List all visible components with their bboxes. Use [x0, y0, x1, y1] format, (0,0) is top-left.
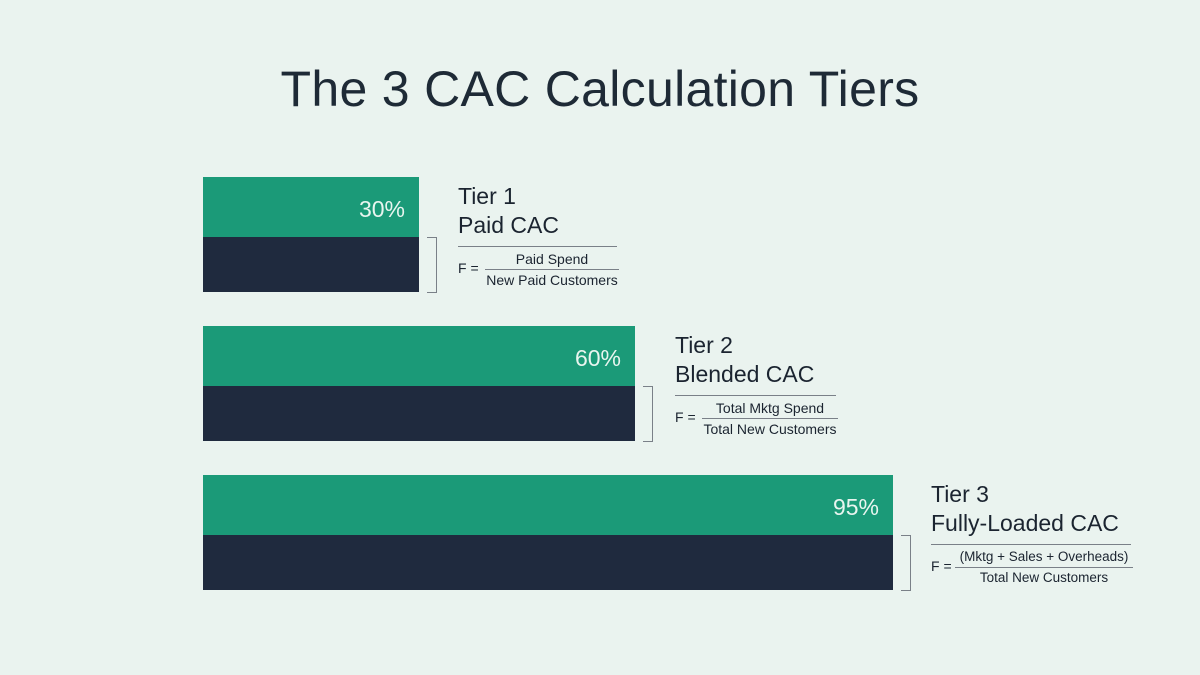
formula: tier 2: Total Mktg Spend Total New Customers [703, 400, 837, 437]
label: tier 3 [931, 481, 1119, 536]
tier 3 [203, 475, 1133, 591]
bar: tier 3 [203, 475, 893, 590]
formula: tier 1: F = [458, 260, 479, 276]
label: tier 3: Fully-Loaded CAC [931, 510, 1119, 536]
title: The 3 CAC Calculation Tiers [281, 61, 919, 117]
formula: tier 3: (Mktg + Sales + Overheads) Total New Customers [960, 549, 1128, 585]
label: tier 1 [458, 183, 559, 238]
formula: tier 2: F = [675, 409, 696, 425]
label: tier 2: Tier 2 [675, 332, 733, 358]
formula: tier 1: Paid Spend New Paid Customers [486, 251, 618, 288]
bracket [643, 386, 653, 442]
label: tier 1: Tier 1 [458, 183, 516, 209]
bar: tier 3: 95% [833, 494, 879, 520]
tier 2 [203, 326, 838, 442]
label: tier 2: Blended CAC [675, 361, 814, 387]
label: tier 2 [675, 332, 814, 387]
bar: tier 1: 30% [359, 196, 405, 222]
label: tier 3: Tier 3 [931, 481, 989, 507]
bar: tier 2 [203, 326, 635, 441]
label: tier 1: Paid CAC [458, 212, 559, 238]
bracket [427, 237, 437, 293]
tier 1 [203, 177, 619, 293]
bracket [901, 535, 911, 591]
formula: tier 3: F = [931, 558, 952, 574]
bar: tier 1 [203, 177, 419, 292]
bar: tier 2: 60% [575, 345, 621, 371]
